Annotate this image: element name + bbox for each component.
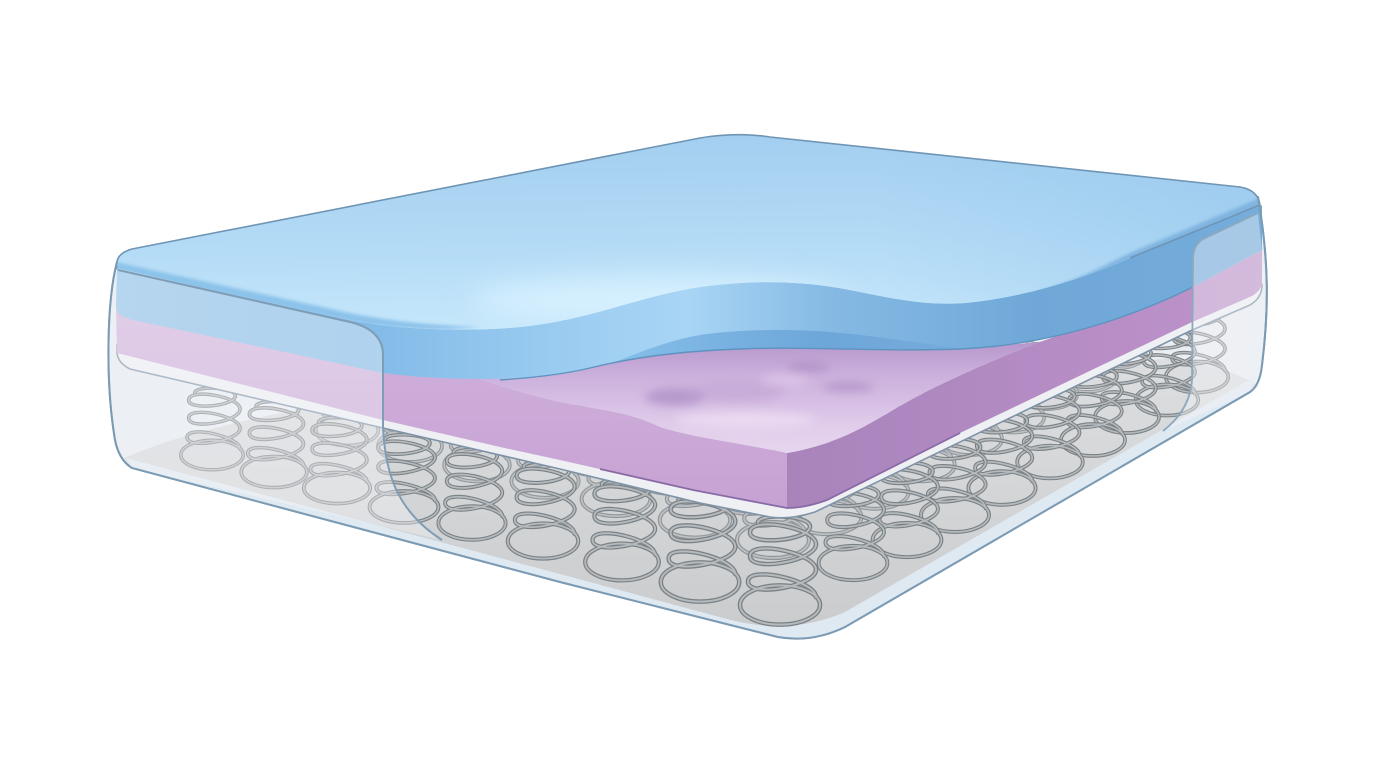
clear casing corner: left edge line (118, 270, 442, 540)
coil springs (181, 289, 1228, 625)
blue bottom edge line (500, 287, 1193, 380)
body imprint in foam (645, 362, 874, 428)
blue foam layer (116, 130, 1270, 380)
surface highlight (116, 130, 1270, 329)
top surface outline (116, 135, 1260, 270)
transparent bottom edge band (126, 376, 1256, 639)
clear casing corner: right edge line (1163, 213, 1258, 431)
casing inner lip under mattress (117, 280, 1262, 518)
casing outline (108, 197, 1267, 639)
lavender foam layer (116, 250, 1262, 508)
blue top surface (117, 135, 1260, 330)
foam right side face (787, 250, 1262, 508)
right rim (1048, 198, 1258, 287)
foam bottom shadow line (600, 433, 960, 508)
foam front face (116, 308, 787, 508)
left rim (116, 262, 480, 329)
clear casing corner: right (1163, 213, 1266, 431)
mattress cutaway illustration (108, 130, 1270, 639)
blue underside shadow (610, 330, 965, 364)
clear outer casing (108, 197, 1267, 639)
foam exposed surface (470, 342, 1040, 453)
clear casing corner: left (108, 268, 442, 540)
blue side face (116, 205, 1262, 379)
grey floor of casing (124, 358, 1258, 639)
